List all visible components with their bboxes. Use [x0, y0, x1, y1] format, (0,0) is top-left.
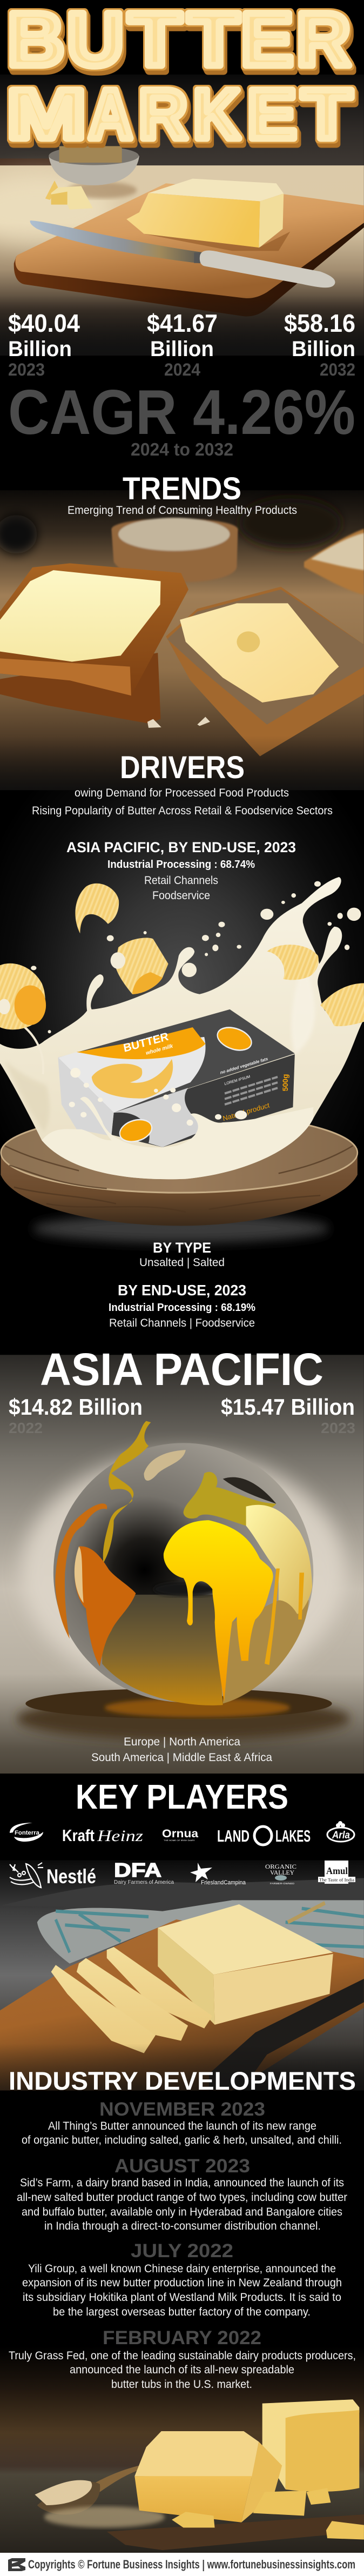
logo: Kraft Heinz: Heinz: [97, 1827, 143, 1845]
stat: 2024 market value: 2024: [164, 360, 200, 379]
development: November 2023: NOVEMBER 2023: [99, 2099, 265, 2120]
stat: 2032 market value: 2032: [320, 360, 355, 379]
segment list: type: Unsalted | Salted: [139, 1256, 225, 1269]
stat: 2022 value: [9, 1394, 143, 1436]
butter package: no added vegetable fats: [220, 1056, 269, 1075]
butter pieces: [172, 2488, 364, 2540]
knife: [209, 1979, 364, 2090]
toast in background: [304, 529, 364, 595]
icon: Fortune Business Insights logo: [8, 2558, 25, 2571]
segment list: end-use: Retail Channels | Foodservice: [109, 1316, 255, 1329]
stat: 2022 value: 2022: [9, 1420, 43, 1436]
logo: Amul: Amul: [326, 1865, 348, 1876]
logo: Arla: [327, 1821, 354, 1842]
logo: Organic Valley: FARMER-OWNED: [270, 1882, 295, 1885]
title: BUTTER MARKET: [7, 0, 352, 153]
drips: [265, 1569, 304, 1665]
logo: Kraft Heinz: Kraft: [62, 1826, 95, 1845]
segment list: end-use: [109, 1302, 255, 1329]
photo: buttered toast: [0, 490, 364, 791]
butter block back: [262, 2399, 359, 2492]
drivers text: [32, 786, 333, 817]
segment list: Asia Pacific end-use: [107, 859, 255, 902]
logo: Land O Lakes: LAKES: [275, 1826, 311, 1845]
crumbs: [44, 2506, 165, 2528]
butter package: 500g: [281, 1074, 289, 1091]
title: BUTTER MARKET: A: [89, 75, 132, 153]
development: July 2022: expansion of its new butter production line in New Zealand through: [22, 2276, 342, 2289]
heading: by type: BY TYPE: [153, 1240, 211, 1256]
logo: Ornua: THE HOME OF IRISH DAIRY: [164, 1839, 195, 1842]
development: February 2022: FEBRUARY 2022: [103, 2327, 261, 2348]
toast stack: [0, 563, 188, 724]
logo: Dairy Farmers of America: [114, 1859, 174, 1885]
photo: sliced butter on board with plaid cloth: [0, 1860, 364, 2090]
development: November 2023: All Thing’s Butter announced the launch of its new range: [48, 2119, 316, 2132]
illustration: melting butter globe: [0, 1355, 364, 1823]
title: BUTTER MARKET: T: [302, 75, 352, 153]
stat: 2023 market value: 2023: [8, 360, 45, 379]
development: February 2022: butter tubs in the U.S. market.: [111, 2378, 252, 2391]
wooden spoon: [35, 2466, 139, 2514]
heading: key players: KEY PLAYERS: [76, 1777, 288, 1816]
cutting board: [14, 183, 364, 316]
continent: Asia highlight: [246, 1505, 312, 1614]
butter block: [126, 179, 290, 251]
butter package: BUTTER: [123, 1031, 170, 1055]
development: August 2023: in India through a direct-to-consumer distribution channel.: [44, 2219, 321, 2232]
drivers text: Rising Popularity of Butter Across Retail & Foodservice Sectors: [32, 804, 333, 817]
stat: 2022 value: $14.82 Billion: [9, 1394, 143, 1420]
butter block: [158, 1904, 333, 2025]
stat: 2023 value: 2023: [321, 1420, 355, 1436]
drivers text: owing Demand for Processed Food Products: [75, 786, 289, 799]
logo: Fonterra: Fonterra: [15, 1830, 40, 1836]
butter curls: [0, 884, 364, 1029]
trends text: Emerging Trend of Consuming Healthy Products: [68, 504, 297, 517]
logo: Land O Lakes: [217, 1826, 311, 1845]
other regions: South America | Middle East & Africa: [91, 1751, 272, 1764]
drip streams, left edge: [55, 1503, 107, 1639]
development: July 2022: JULY 2022: [131, 2240, 233, 2261]
logo: Fonterra: [10, 1823, 43, 1842]
logo: FrieslandCampina: [190, 1863, 246, 1886]
segment list: Asia Pacific end-use: Foodservice: [152, 889, 210, 902]
stat: 2032 market value: $58.16: [284, 309, 355, 337]
serving board: [107, 2514, 364, 2550]
butter block front: [134, 2431, 282, 2523]
footer: [0, 2553, 364, 2576]
development: August 2023: all-new salted butter product range of two types, including cow butter: [17, 2191, 347, 2204]
puddle: [25, 1688, 332, 1719]
segment list: Asia Pacific end-use: Retail Channels: [144, 874, 218, 887]
globe: [53, 1421, 313, 1705]
butter slices: [51, 1947, 212, 2053]
stat: 2023 market value: Billion: [8, 337, 72, 361]
logo: Amul: The Taste of India: [319, 1877, 354, 1883]
development: November 2023: [22, 2099, 342, 2146]
heading: trends: TRENDS: [123, 471, 241, 506]
heading: Asia Pacific by end-use: ASIA PACIFIC, BY END-USE, 2023: [66, 839, 296, 855]
CAGR period: 2024 to 2032: [131, 439, 233, 459]
segment list: Asia Pacific end-use: Industrial Processing : 68.74%: [107, 859, 255, 871]
stat: 2032 market value: [284, 309, 355, 379]
logo: Land O Lakes: LAND: [217, 1826, 250, 1845]
development: July 2022: be the largest overseas butter factory of the company.: [53, 2305, 311, 2318]
icon: bowl: [49, 146, 139, 198]
logo: Arla: Arla: [332, 1830, 350, 1841]
logo: Kraft Heinz: [62, 1826, 143, 1845]
heading: by end-use: BY END-USE, 2023: [118, 1282, 246, 1299]
continent: Europe: [184, 1472, 276, 1525]
logo: FrieslandCampina: FrieslandCampina: [201, 1879, 246, 1886]
heading: industry developments: INDUSTRY DEVELOPMENTS: [9, 2066, 356, 2095]
butter package: whole milk: [145, 1043, 173, 1056]
development: August 2023: [17, 2156, 347, 2232]
hero photo: butter block on cutting board: [0, 75, 364, 356]
logo: Amul: [318, 1861, 355, 1884]
other regions: Europe | North America: [124, 1735, 240, 1748]
development: July 2022: [22, 2240, 342, 2318]
stat: 2023 value: $15.47 Billion: [221, 1394, 355, 1420]
toast right: [166, 587, 364, 756]
plaid cloth: [37, 1900, 364, 1964]
development: February 2022: announced the launch of its all-new spreadable: [70, 2363, 294, 2376]
stat: 2024 market value: Billion: [150, 337, 214, 361]
icon: knife: [30, 220, 335, 287]
illustration: butter box in milk splash on wooden board: [0, 790, 364, 1250]
development: February 2022: [9, 2327, 356, 2391]
photo: butter blocks and spoon with crumbs: [0, 2346, 364, 2553]
logo: Organic Valley: ORGANIC: [265, 1863, 296, 1870]
continent: North America: [103, 1421, 151, 1563]
development: August 2023: and buffalo butter, available only in Hyderabad and Bangalore cities: [22, 2205, 342, 2218]
butter package: [58, 1009, 295, 1147]
logo: Organic Valley: VALLEY: [270, 1869, 294, 1876]
milk splash: [0, 877, 364, 1179]
development: July 2022: Yili Group, a well known Chinese dairy enterprise, announced the: [28, 2262, 336, 2275]
logo: Nestle: Nestlé: [46, 1865, 96, 1888]
continent: Greenland: [144, 1450, 186, 1481]
logo: Organic Valley: [265, 1863, 296, 1885]
butter crumbs: [45, 180, 93, 210]
heading: Asia Pacific: ASIA PACIFIC: [40, 1344, 323, 1395]
stat: 2023 market value: [8, 309, 80, 379]
title: BUTTER MARKET: K: [193, 75, 240, 153]
cutting board: [0, 1919, 364, 2090]
continent: Africa: [164, 1520, 273, 1702]
front milk rim: [42, 1068, 313, 1179]
title: BUTTER MARKET: R: [139, 75, 187, 153]
continent: South America: [75, 1547, 136, 1667]
development: August 2023: AUGUST 2023: [114, 2156, 250, 2177]
other regions: [91, 1735, 272, 1764]
logo: Dairy Farmers of America: Dairy Farmers of America: [114, 1879, 174, 1885]
stat: 2024 market value: [147, 309, 218, 379]
development: July 2022: its subsidiary Hokitika plant of Westland Milk Products. It is said to: [23, 2291, 341, 2304]
logo: Ornua: Ornua: [162, 1828, 198, 1840]
logo: Nestle: [10, 1863, 96, 1888]
heading: drivers: DRIVERS: [120, 750, 245, 785]
segment list: end-use: Industrial Processing : 68.19%: [109, 1302, 255, 1314]
development: November 2023: of organic butter, including salted, garlic & herb, unsalted, and chilli.: [22, 2133, 342, 2146]
development: August 2023: Sid’s Farm, a dairy brand based in India, announced the launch of its: [20, 2176, 344, 2189]
title: BUTTER MARKET: E: [247, 75, 296, 153]
key players black band: [0, 1774, 364, 1861]
bowl in background: [111, 518, 238, 582]
stat: 2023 market value: $40.04: [8, 309, 80, 337]
wooden board: [1, 1113, 358, 1242]
title: BUTTER MARKET: M: [7, 75, 86, 153]
butter package: Natural product: [222, 1101, 271, 1122]
crumbs: [147, 717, 210, 728]
stat: 2023 value: [221, 1394, 355, 1436]
logo: Dairy Farmers of America: DFA: [114, 1859, 161, 1881]
butter package: LOREM IPSUM: [224, 1075, 251, 1086]
stat: 2024 market value: $41.67: [147, 309, 218, 337]
stat: 2032 market value: Billion: [292, 337, 355, 361]
